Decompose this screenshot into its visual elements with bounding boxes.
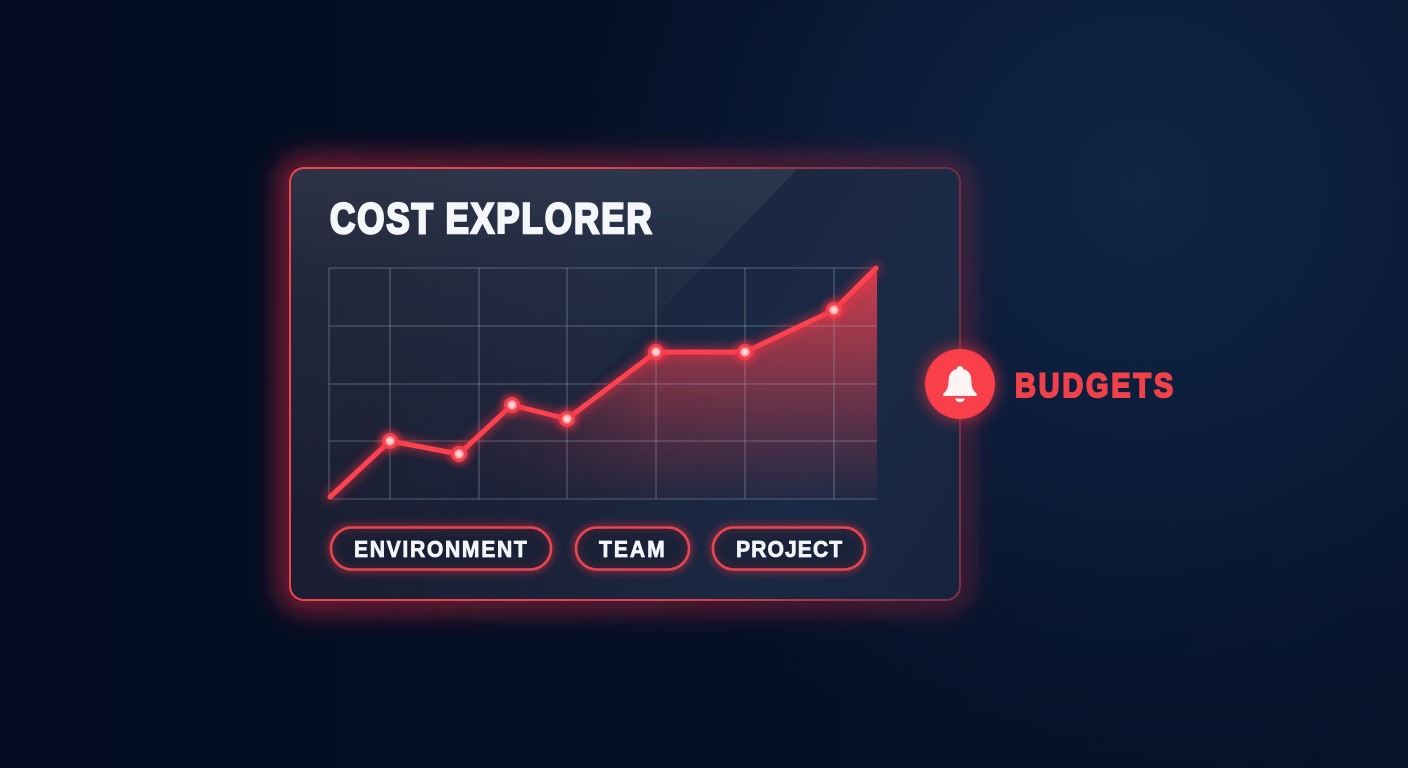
tag: environment bbox=[331, 528, 551, 570]
data points bbox=[380, 300, 844, 464]
line chart bbox=[329, 268, 877, 499]
tag: project: PROJECT bbox=[736, 536, 843, 562]
line glow bbox=[330, 268, 876, 497]
data line bbox=[330, 268, 876, 497]
panel: cost explorer bbox=[290, 168, 960, 600]
tag: environment: ENVIRONMENT bbox=[354, 536, 527, 562]
label: budgets: BUDGETS bbox=[1015, 366, 1173, 405]
title: EXPLORER bbox=[446, 196, 654, 243]
tag: project bbox=[713, 528, 865, 570]
tag: team bbox=[576, 528, 689, 570]
panel border bbox=[290, 168, 960, 600]
tag: team: TEAM bbox=[599, 536, 665, 562]
panel body bbox=[290, 168, 960, 600]
chart grid bbox=[329, 268, 877, 499]
panel glow bbox=[290, 168, 960, 600]
title: COST bbox=[330, 196, 435, 243]
bell glyph bbox=[943, 366, 977, 396]
chart area fill bbox=[489, 270, 877, 496]
icon: budgets bell bbox=[923, 347, 997, 421]
glass sheen bbox=[291, 169, 797, 248]
